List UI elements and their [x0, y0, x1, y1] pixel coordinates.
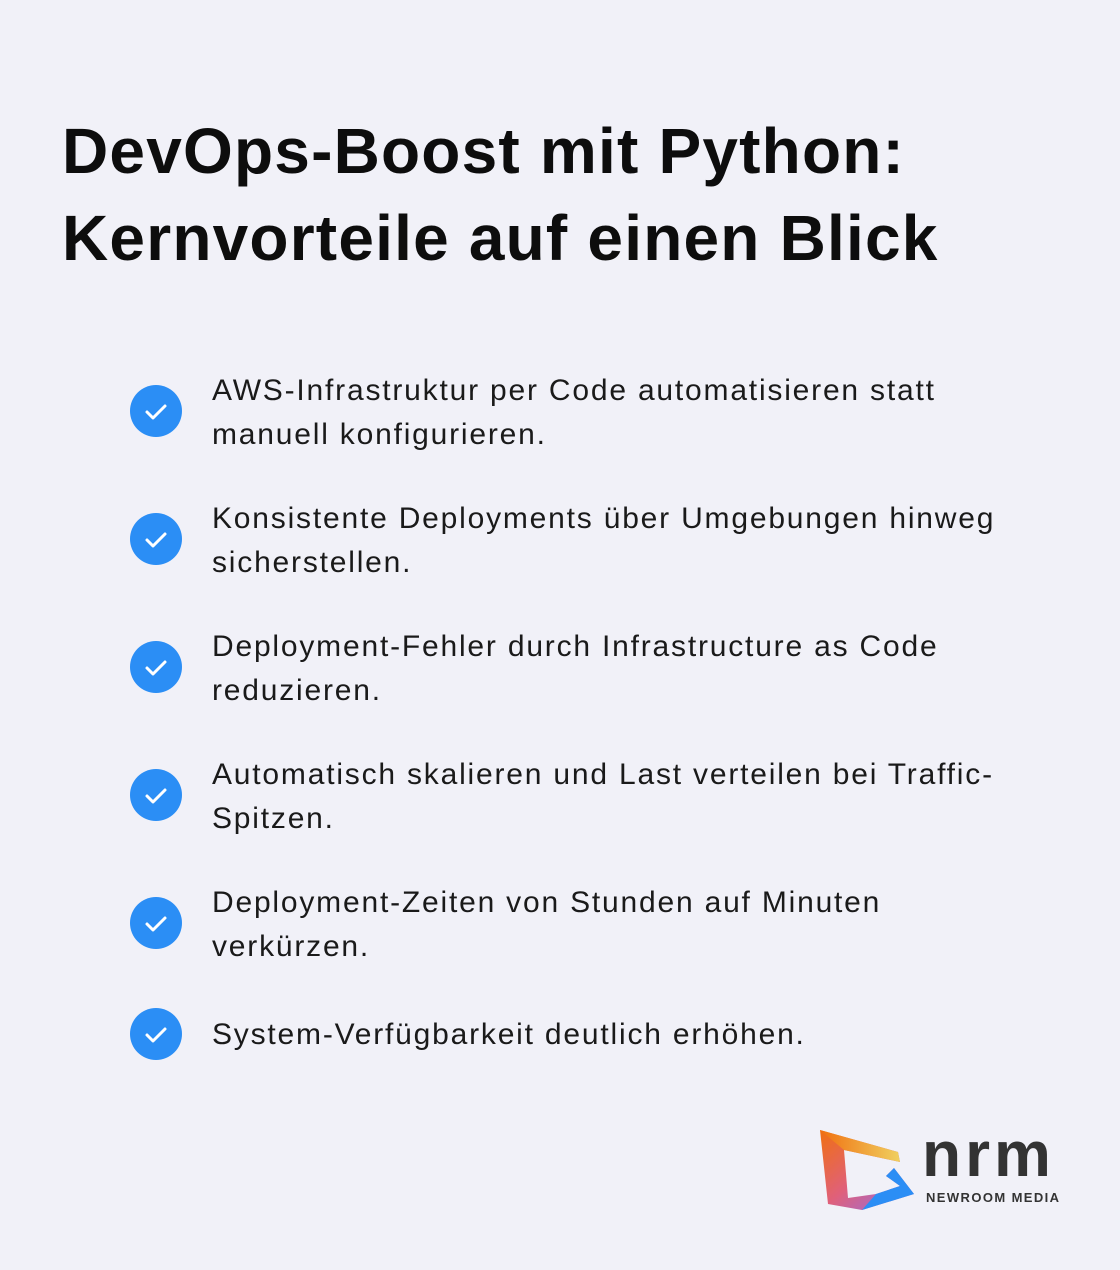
item 5	[130, 886, 881, 963]
item 4	[130, 758, 994, 835]
title: DevOps-Boost mit Python:	[62, 115, 905, 187]
item 1: manuell konfigurieren.	[212, 418, 547, 451]
item 6: System-Verfügbarkeit deutlich erhöhen.	[212, 1018, 806, 1051]
item 3: Deployment-Fehler durch Infrastructure as Code	[212, 630, 938, 663]
item 1	[130, 374, 936, 451]
item 1: AWS-Infrastruktur per Code automatisieren statt	[212, 374, 936, 407]
item 5: verkürzen.	[212, 930, 370, 963]
icon: check	[130, 769, 182, 821]
logo: NEWROOM MEDIA	[926, 1190, 1060, 1205]
item 4: Spitzen.	[212, 802, 335, 835]
item 5: Deployment-Zeiten von Stunden auf Minuten	[212, 886, 881, 919]
item 6	[130, 1008, 806, 1060]
icon: check	[130, 641, 182, 693]
icon: check	[130, 385, 182, 437]
logo: nrm	[922, 1118, 1055, 1190]
item 3: reduzieren.	[212, 674, 382, 707]
logo	[820, 1118, 1060, 1210]
item 3	[130, 630, 938, 707]
item 4: Automatisch skalieren und Last verteilen bei Traffic-	[212, 758, 994, 791]
icon: check	[130, 513, 182, 565]
title: Kernvorteile auf einen Blick	[62, 202, 939, 274]
icon: check	[130, 897, 182, 949]
item 2	[130, 502, 995, 579]
item 2: Konsistente Deployments über Umgebungen hinweg	[212, 502, 995, 535]
title	[62, 115, 939, 274]
icon: check	[130, 1008, 182, 1060]
icon: logo mark	[820, 1130, 914, 1210]
item 2: sicherstellen.	[212, 546, 412, 579]
